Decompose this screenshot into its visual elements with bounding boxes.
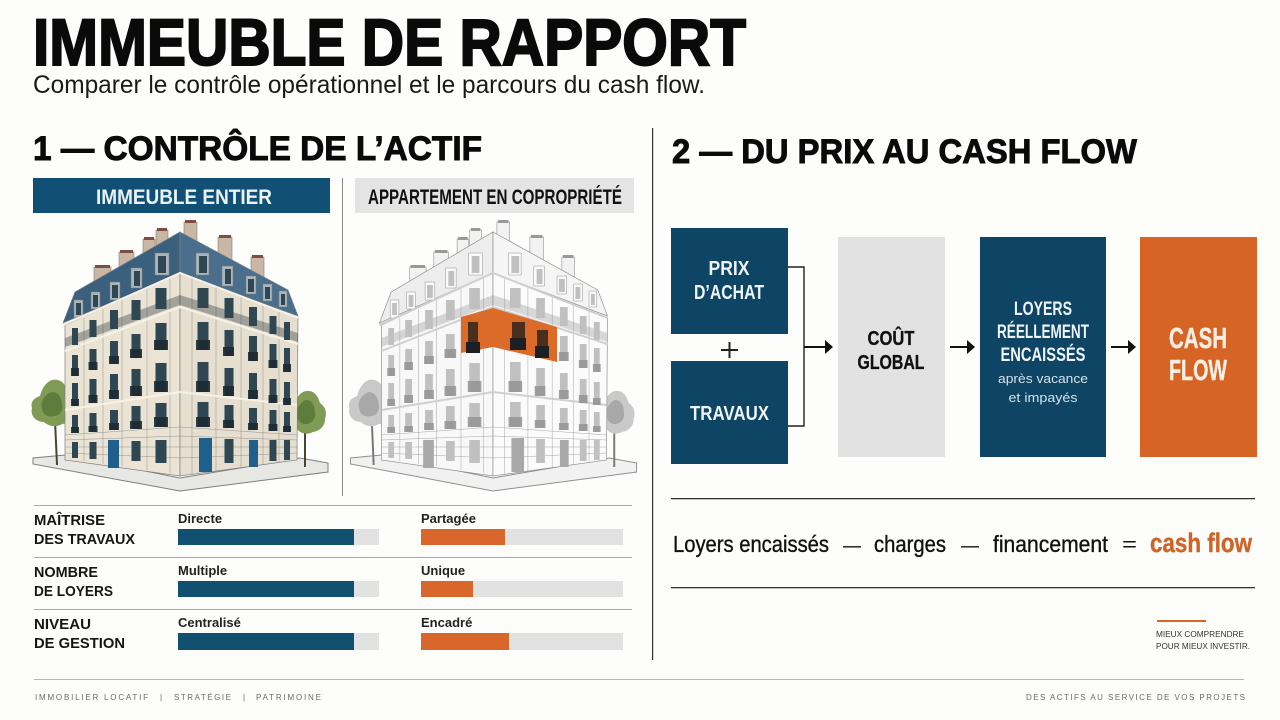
comparison row: nombre de loyers: Unique xyxy=(421,563,465,578)
box: coût global xyxy=(838,237,945,457)
footer left: | xyxy=(160,693,162,702)
box: prix d'achat xyxy=(671,228,788,334)
apartment highlight xyxy=(461,308,557,362)
box: coût global: GLOBAL xyxy=(858,352,924,374)
box: loyers réellement encaissés xyxy=(980,237,1106,457)
formula: — xyxy=(843,535,861,557)
comparison row: niveau de gestion: DE GESTION xyxy=(34,635,125,652)
panel: contrôle de l'actif xyxy=(31,129,637,652)
arrow to loyers xyxy=(950,340,975,354)
formula xyxy=(673,528,1253,558)
band: appartement en copropriété xyxy=(355,178,634,213)
plus sign xyxy=(721,342,738,358)
box: loyers réellement encaissés: après vacance xyxy=(998,371,1088,386)
formula: — xyxy=(961,535,979,557)
box: travaux xyxy=(671,361,788,464)
footer right: DES ACTIFS AU SERVICE DE VOS PROJETS xyxy=(1026,693,1245,702)
band: appartement en copropriété: APPARTEMENT EN COPROPRIÉTÉ xyxy=(368,186,622,209)
footer left: IMMOBILIER LOCATIF xyxy=(35,693,148,702)
formula: charges xyxy=(874,531,946,557)
box: travaux: TRAVAUX xyxy=(690,403,770,425)
comparison row: nombre de loyers xyxy=(34,557,632,600)
arrow to cash flow xyxy=(1111,340,1136,354)
box: loyers réellement encaissés: RÉELLEMENT xyxy=(997,321,1089,343)
comparison row: maîtrise des travaux: DES TRAVAUX xyxy=(34,531,135,548)
panel: du prix au cash flow xyxy=(671,133,1257,651)
formula: financement xyxy=(993,531,1109,557)
box: loyers réellement encaissés: ENCAISSÉS xyxy=(1000,344,1086,366)
band: immeuble entier: IMMEUBLE ENTIER xyxy=(96,186,272,209)
formula: cash flow xyxy=(1150,528,1253,558)
formula: = xyxy=(1122,534,1137,556)
comparison row: maîtrise des travaux: Partagée xyxy=(421,511,476,526)
subtitle: Comparer le contrôle opérationnel et le parcours du cash flow. xyxy=(33,71,705,99)
heading: section 2: 2 — DU PRIX AU CASH FLOW xyxy=(672,133,1138,171)
comparison row: nombre de loyers: DE LOYERS xyxy=(34,583,113,600)
footer left: PATRIMOINE xyxy=(256,693,321,702)
box: prix d'achat: D’ACHAT xyxy=(694,282,764,304)
callout: mieux comprendre: MIEUX COMPRENDRE xyxy=(1156,630,1244,639)
title: IMMEUBLE DE RAPPORT xyxy=(33,5,746,79)
callout: mieux comprendre: POUR MIEUX INVESTIR. xyxy=(1156,642,1250,651)
comparison row: niveau de gestion: NIVEAU xyxy=(34,616,91,633)
comparison row: niveau de gestion: Encadré xyxy=(421,615,472,630)
comparison row: nombre de loyers: NOMBRE xyxy=(34,564,98,581)
band: immeuble entier xyxy=(33,178,330,213)
illustration: line-art building with highlighted apartment xyxy=(349,220,637,491)
box: prix d'achat: PRIX xyxy=(708,258,750,280)
footer left: STRATÉGIE xyxy=(174,693,231,702)
bracket arrow to coût global xyxy=(788,267,833,426)
comparison row: maîtrise des travaux: Directe xyxy=(178,511,222,526)
comparison row: maîtrise des travaux: MAÎTRISE xyxy=(34,511,105,529)
comparison row: nombre de loyers: Multiple xyxy=(178,563,227,578)
box: cash flow: FLOW xyxy=(1169,355,1227,387)
heading: section 1: 1 — CONTRÔLE DE L’ACTIF xyxy=(33,129,482,168)
comparison row: maîtrise des travaux xyxy=(34,505,632,548)
formula: Loyers encaissés xyxy=(673,531,829,557)
box: loyers réellement encaissés: et impayés xyxy=(1008,390,1078,405)
box: loyers réellement encaissés: LOYERS xyxy=(1014,299,1072,320)
footer left: | xyxy=(243,693,245,702)
box: coût global: COÛT xyxy=(868,326,914,350)
comparison row: niveau de gestion: Centralisé xyxy=(178,615,241,630)
box: cash flow: CASH xyxy=(1169,323,1227,355)
callout: mieux comprendre xyxy=(1156,620,1250,651)
box: cash flow xyxy=(1140,237,1257,457)
comparison row: niveau de gestion xyxy=(34,609,632,652)
illustration: colored whole building xyxy=(31,220,328,491)
